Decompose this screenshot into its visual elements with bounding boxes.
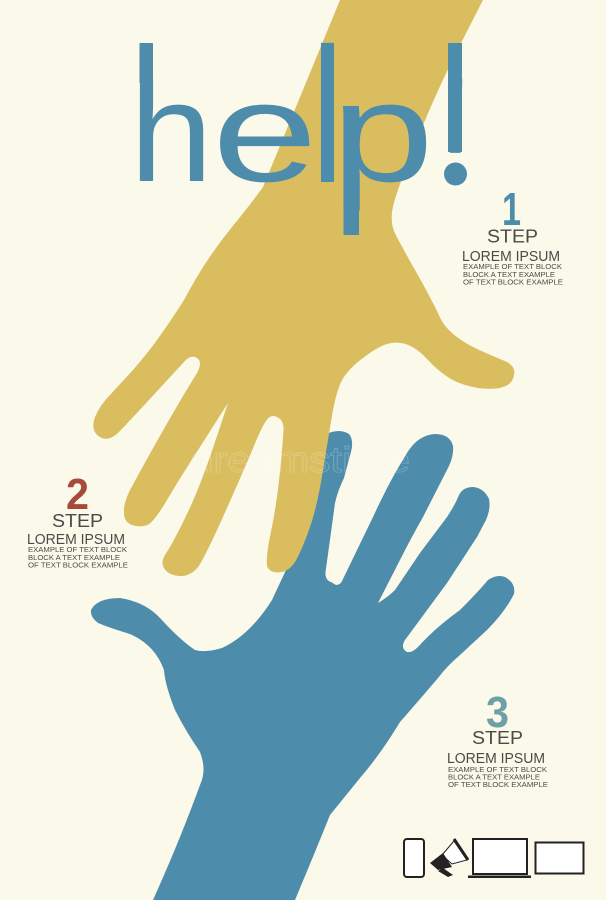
- step 1 block: BLOCK A TEXT EXAMPLE: [463, 270, 555, 279]
- step 2 block: LOREM IPSUM: [27, 532, 125, 548]
- step 1 block: [462, 183, 563, 286]
- title: help!: h: [130, 53, 213, 211]
- step 1 block: STEP: [487, 226, 538, 246]
- icon: laptop: [468, 839, 531, 878]
- step 2 block: OF TEXT BLOCK EXAMPLE: [28, 560, 128, 570]
- step 3 block: OF TEXT BLOCK EXAMPLE: [448, 780, 548, 789]
- step 3 block: EXAMPLE OF TEXT BLOCK: [448, 765, 547, 774]
- step 2 block: [27, 470, 128, 570]
- step 3 block: STEP: [472, 728, 523, 748]
- step 3 block: LOREM IPSUM: [447, 751, 545, 767]
- step 3 block: [447, 688, 548, 789]
- step 2 block: 2: [66, 470, 89, 519]
- step 3 block: 3: [486, 688, 509, 737]
- step 2 block: EXAMPLE OF TEXT BLOCK: [28, 545, 127, 554]
- step 1 block: LOREM IPSUM: [462, 249, 560, 265]
- title: help!: !: [435, 47, 476, 214]
- title: help!: p: [331, 53, 434, 211]
- step 1 block: OF TEXT BLOCK EXAMPLE: [463, 278, 563, 286]
- step 1 block: 1: [502, 183, 521, 235]
- blue hand reaching up: [91, 431, 514, 900]
- icon: smartphone: [404, 839, 424, 877]
- title: help!: l: [311, 10, 344, 223]
- step 2 block: STEP: [52, 511, 103, 531]
- icon: megaphone: [430, 839, 468, 877]
- watermark: dreamstime: [190, 439, 410, 480]
- yellow hand reaching down: [93, 0, 514, 576]
- icon: tablet: [536, 842, 584, 874]
- title: help!: e: [212, 52, 318, 211]
- step 3 block: BLOCK A TEXT EXAMPLE: [448, 772, 540, 782]
- step 2 block: BLOCK A TEXT EXAMPLE: [28, 553, 120, 562]
- step 1 block: EXAMPLE OF TEXT BLOCK: [463, 262, 562, 271]
- title: help!: [130, 10, 476, 235]
